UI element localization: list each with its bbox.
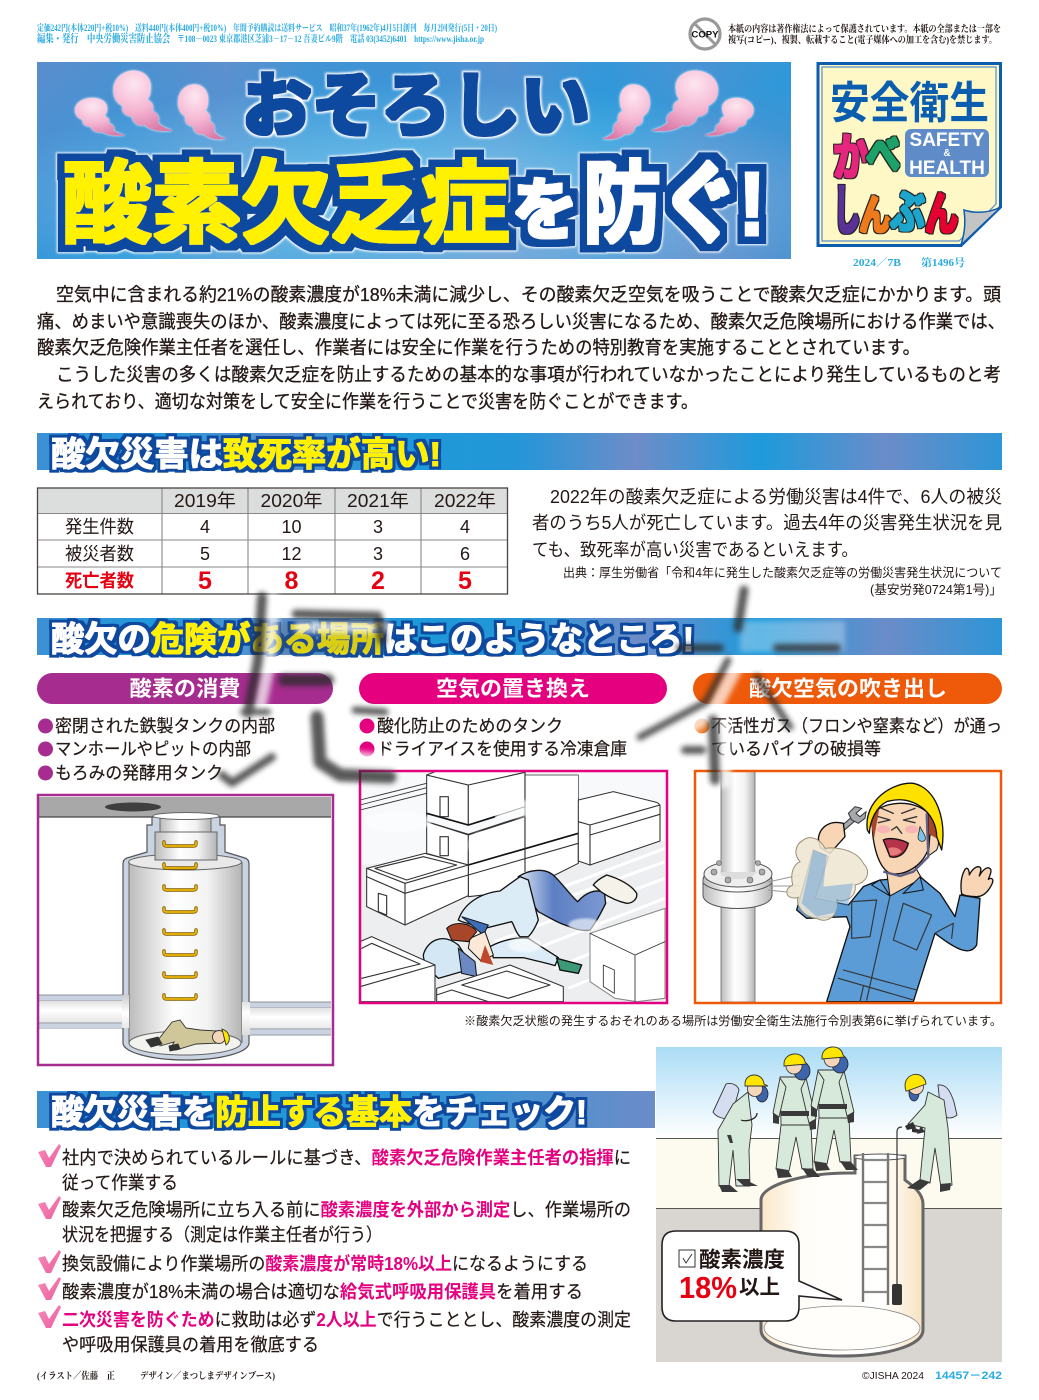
check item 5: や呼吸用保護具の着用を徹底する	[62, 1335, 319, 1355]
header price and publisher text	[37, 22, 497, 45]
section heading: fatality rate: 酸欠災害は致死率が高い!	[51, 435, 441, 474]
pill heading: 酸素の消費	[130, 677, 240, 701]
watermark: blurred sample characters	[222, 590, 845, 783]
pill heading	[37, 673, 333, 704]
bullet list: ているパイプの破損等	[711, 739, 881, 759]
table: accident statistics: 4	[460, 517, 470, 537]
table: accident statistics	[37, 488, 508, 595]
text: fatality explanation: 者のうち5人が死亡しています。過去4年の災害発生状況を見	[532, 513, 1002, 533]
check item 2: 酸素欠乏危険場所に立ち入る前に酸素濃度を外部から測定し、作業場所の	[62, 1200, 631, 1220]
title line one: おそろしい	[242, 67, 590, 145]
check item 1	[38, 1144, 631, 1193]
logo: safety and health wall newspaper: HEALTH	[909, 158, 985, 179]
issue date: 2024／7B	[853, 257, 901, 269]
bullet list: 密閉された鉄製タンクの内部	[55, 716, 275, 736]
source citation	[563, 565, 1002, 597]
logo: safety and health wall newspaper: ん	[859, 192, 891, 239]
header price and publisher text: 定価242円(本体220円+税10%) 送料440円(本体400円+税10%) 年間予約購読は送料サービス 昭和37年(1962年)4月5日創刊 毎月2回発行(5日・20日)	[37, 22, 497, 33]
bullet list: マンホールやピットの内部	[55, 739, 251, 759]
bullet list	[360, 716, 627, 759]
bullet list: 酸化防止のためのタンク	[377, 716, 563, 736]
table: accident statistics: 5	[200, 544, 210, 564]
logo: safety and health wall newspaper: 安全衛生	[830, 79, 989, 128]
logo: safety and health wall newspaper: し	[834, 181, 860, 241]
logo: safety and health wall newspaper: ん	[925, 188, 958, 240]
source citation: 出典：厚生労働省「令和4年に発生した酸素欠乏症等の労働災害発生状況について	[563, 565, 1002, 580]
illustration: underground tank	[38, 795, 333, 1065]
copyright and code: ©JISHA 2024	[862, 1370, 924, 1382]
section heading: fatality rate	[37, 433, 1002, 474]
check item 1: 社内で決められているルールに基づき、酸素欠乏危険作業主任者の指揮に	[62, 1147, 631, 1168]
table: accident statistics: 10	[281, 517, 302, 537]
collapsed worker	[146, 1020, 229, 1051]
check item 5	[38, 1305, 631, 1355]
icon: no copy	[690, 19, 720, 49]
pill heading: 空気の置き換え	[436, 677, 590, 701]
logo: safety and health wall newspaper: SAFETY	[910, 130, 985, 151]
pill heading: 酸欠空気の吹き出し	[749, 676, 947, 701]
intro text block: 空気中に含まれる約21%の酸素濃度が18%未満に減少し、その酸素欠乏空気を吸うことで酸素欠乏症にかかります。頭	[56, 284, 1001, 305]
table: accident statistics: 5	[198, 567, 212, 595]
check item 5: 二次災害を防ぐために救助は必ず2人以上で行うこととし、酸素濃度の測定	[62, 1310, 631, 1330]
bent worker right	[905, 1074, 957, 1192]
intro text block: こうした災害の多くは酸素欠乏症を防止するための基本的な事項が行われていなかったことにより発生しているものと考	[56, 364, 1001, 385]
title line two: 酸素欠乏症	[62, 155, 510, 255]
intro text block: えられており、適切な対策をして安全に作業を行うことで災害を防ぐことができます。	[37, 391, 698, 412]
footnote: ※酸素欠乏状態の発生するおそれのある場所は労働安全衛生法施行令別表第6に挙げられています。	[464, 1013, 1002, 1028]
bent worker left	[713, 1075, 768, 1192]
section heading: basic prevention checks: 酸欠災害を防止する基本をチェック!	[51, 1094, 587, 1132]
source citation: (基安労発0724第1号)」	[870, 582, 1002, 597]
illustration: worker at leaking pipe	[695, 771, 1001, 1003]
table: accident statistics: 被災者数	[65, 544, 134, 564]
intro text block: 酸素欠乏危険作業主任者を選任し、作業者には安全に作業を行うための特別教育を実施することとされています。	[37, 337, 920, 358]
table: accident statistics: 2021年	[347, 491, 409, 511]
panel: oxygen-deficient air blow-out	[693, 673, 1002, 1003]
table: accident statistics: 12	[281, 544, 302, 564]
logo: safety and health wall newspaper: か	[833, 130, 869, 186]
callout: oxygen concentration 18 percent or more: 以上	[739, 1276, 780, 1299]
bullet list: 不活性ガス（フロンや窒素など）が通っ	[711, 716, 1002, 736]
check item 2	[38, 1196, 631, 1245]
table: accident statistics: 2020年	[260, 491, 322, 511]
check item 4: 酸素濃度が18%未満の場合は適切な給気式呼吸用保護具を着用する	[62, 1281, 583, 1302]
copyright notice: 複写(コピー)、複製、転載すること(電子媒体への加工を含む)を禁じます。	[728, 34, 997, 46]
copyright and code	[862, 1370, 1002, 1382]
table: accident statistics: 4	[200, 517, 210, 537]
icon: pink gas puffs	[75, 71, 754, 139]
table: accident statistics: 5	[458, 567, 472, 595]
logo: safety and health wall newspaper: ぶ	[890, 186, 925, 238]
checklist	[38, 1144, 631, 1355]
header price and publisher text: 編集・発行 中央労働災害防止協会 〒108－0023 東京都港区芝浦3－17－12 吾妻ビル9階 電話 03(3452)6401 https://www.jisha.or.jp	[37, 31, 484, 45]
table: accident statistics: 死亡者数	[65, 571, 134, 591]
text: fatality explanation: ても、致死率が高い災害であるといえます。	[532, 540, 858, 560]
callout: oxygen concentration 18 percent or more: 酸素濃度	[699, 1248, 785, 1272]
footer credits: (イラスト／佐藤 正 デザイン／まつしまデザインブース)	[37, 1370, 275, 1382]
check item 1: 従って作業する	[62, 1173, 178, 1193]
pill heading	[693, 673, 1002, 704]
logo: safety and health wall newspaper: べ	[866, 131, 900, 180]
section heading: dangerous places: 酸欠の危険がある場所はこのようなところ!	[51, 620, 694, 659]
logo: safety and health wall newspaper: &	[943, 148, 951, 159]
pill heading	[359, 673, 667, 704]
copyright and code: 14457－242	[935, 1370, 1002, 1382]
title line two: を	[512, 173, 578, 249]
text: fatality explanation: 2022年の酸素欠乏症による労働災害は4件で、6人の被災	[550, 487, 1002, 507]
check item 3: 換気設備により作業場所の酸素濃度が常時18%以上になるようにする	[62, 1253, 588, 1274]
tank	[761, 1127, 923, 1356]
workers	[713, 1047, 957, 1192]
bullet list: ドライアイスを使用する冷凍倉庫	[377, 739, 627, 759]
illustration: measuring oxygen concentration at tank	[656, 1047, 1002, 1362]
issue date: 第1496号	[921, 256, 966, 269]
title line two	[62, 155, 765, 255]
logo: safety and health wall newspaper	[818, 64, 1001, 246]
table: accident statistics: 3	[373, 517, 383, 537]
callout: oxygen concentration 18 percent or more: 18%	[679, 1270, 737, 1305]
panel: air replacement	[359, 673, 667, 1003]
title banner	[37, 62, 791, 259]
section heading: dangerous places	[37, 618, 1002, 659]
title line two: 防ぐ!	[583, 155, 765, 255]
check item 2: 状況を把握する（測定は作業主任者が行う）	[62, 1225, 382, 1245]
copyright notice	[728, 23, 1001, 46]
text: fatality explanation	[532, 487, 1002, 560]
table: accident statistics: 発生件数	[65, 517, 134, 537]
table: accident statistics: 2019年	[174, 491, 236, 511]
table: accident statistics: 8	[285, 567, 299, 595]
bullet list: もろみの発酵用タンク	[55, 763, 223, 783]
illustration: collapsed worker in cold store	[360, 771, 667, 1003]
table: accident statistics: 6	[460, 544, 470, 564]
table: accident statistics: 3	[373, 544, 383, 564]
callout: oxygen concentration 18 percent or more	[662, 1231, 842, 1321]
bullet list	[38, 716, 275, 783]
issue date	[853, 256, 966, 269]
table: accident statistics: 2022年	[434, 491, 496, 511]
icon: no copy: COPY	[691, 30, 719, 40]
table: accident statistics: 2	[371, 567, 385, 595]
panel: oxygen consumption	[37, 673, 333, 1065]
bullet list	[694, 716, 1002, 759]
intro text block	[37, 284, 1005, 412]
